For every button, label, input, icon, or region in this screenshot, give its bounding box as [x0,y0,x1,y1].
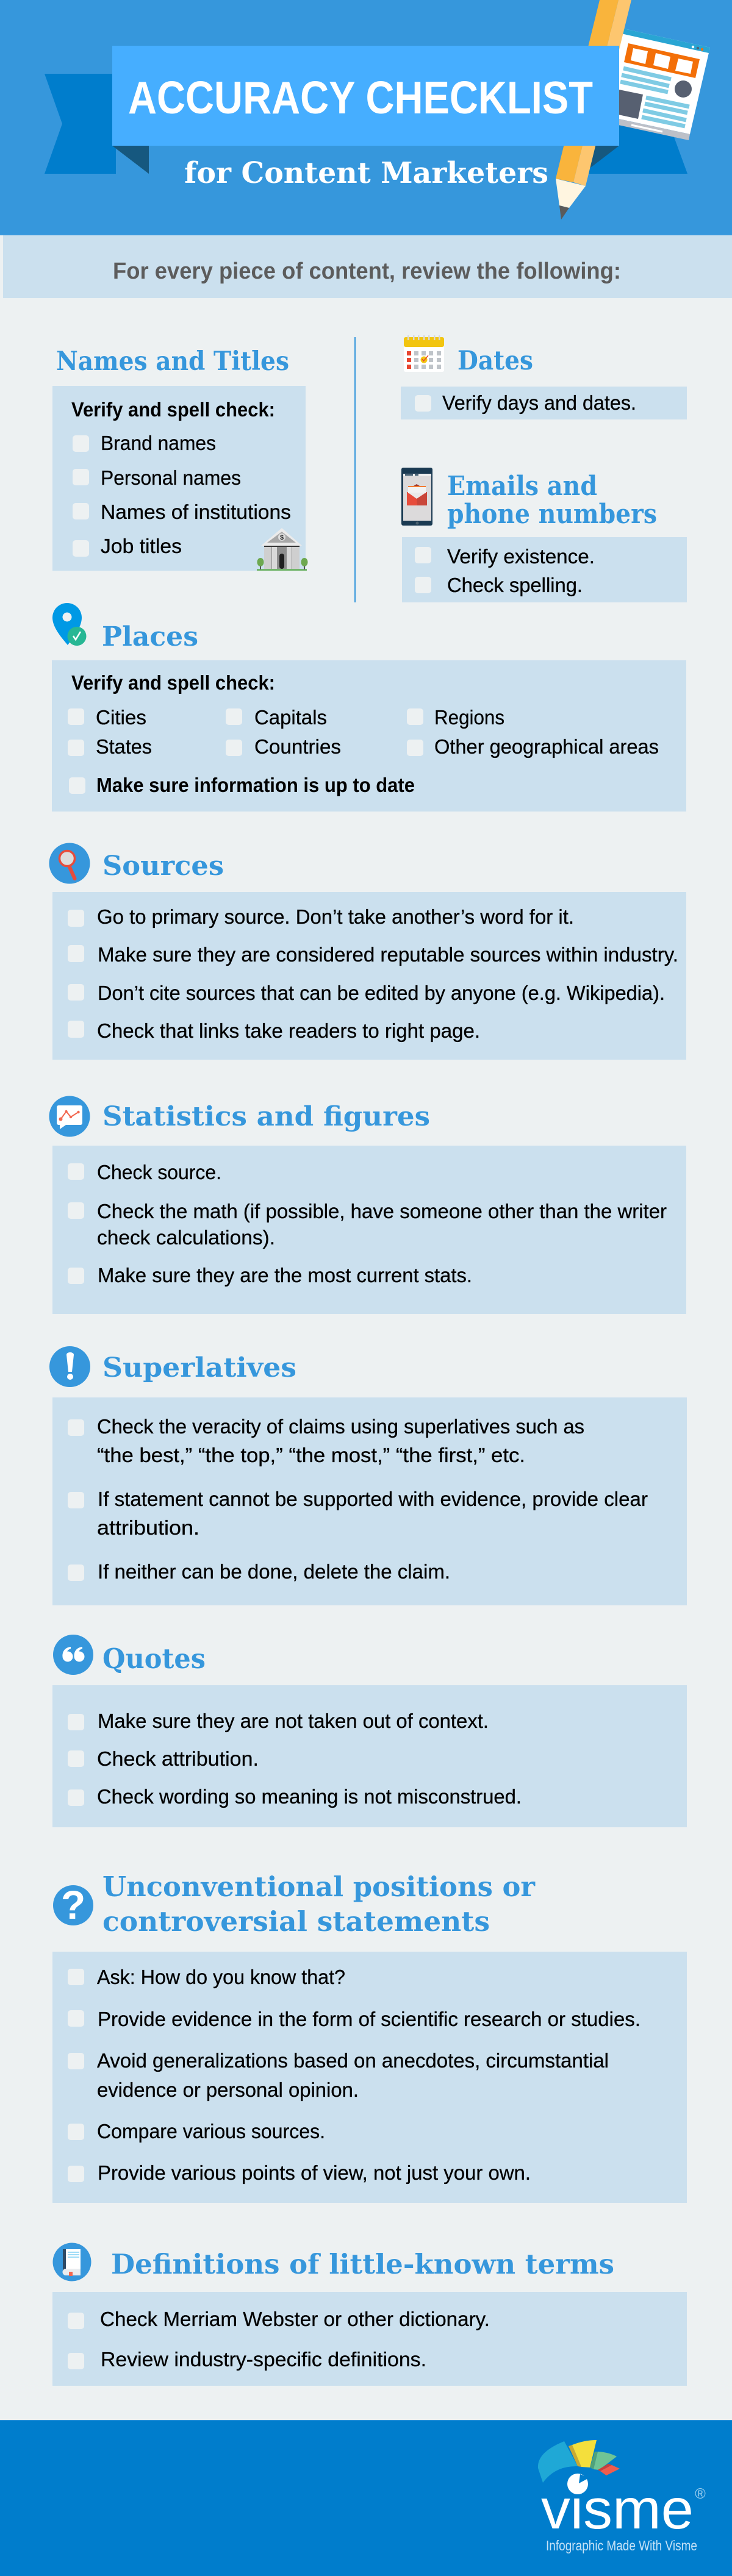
item: cities [68,706,146,729]
heading: quotes: Quotes [102,1643,206,1675]
item: evidence: Provide evidence in the form of scientific research or studies. [98,2008,640,2030]
icon: book [52,2242,92,2282]
heading: names and titles: Names and Titles [56,346,289,377]
icon: phone with envelope [401,468,432,526]
item: check spelling: Check spelling. [447,574,583,596]
title ribbon [112,46,619,146]
item: clear attribution: attribution. [97,1516,199,1539]
item: regions: Regions [434,706,504,729]
panel: places [52,603,686,812]
item: check math: check calculations). [97,1226,275,1249]
heading: places: Places [102,621,198,652]
item: cities: Cities [96,706,146,729]
panel: unconventional positions [52,1871,687,2203]
heading: emails and phone numbers: phone numbers [447,499,657,530]
checklist box [52,1146,686,1314]
item: veracity of claims [68,1415,584,1466]
item: institutions: Names of institutions [101,501,291,523]
icon: bank building: $ [280,534,284,541]
heading: unconventional positions: controversial statements [102,1905,490,1938]
item: current stats: Make sure they are the most current stats. [98,1264,472,1286]
heading: superlatives: Superlatives [102,1352,296,1383]
checklist box [52,892,686,1060]
checklist box [52,660,686,812]
item: job titles: Job titles [101,535,182,557]
ribbon right tail [583,74,687,174]
item: other areas: Other geographical areas [434,735,659,758]
item: primary source: Go to primary source. Don’t take another’s word for it. [97,905,574,928]
item: personal names: Personal names [101,466,241,489]
footer [0,2420,732,2576]
heading: dates: Dates [458,346,533,376]
checklist box [402,537,687,602]
heading: unconventional positions [102,1871,536,1938]
panel: dates [401,335,687,419]
item: compare sources: Compare various sources. [97,2120,325,2143]
heading: emails and phone numbers [447,471,657,530]
divider [354,337,356,602]
heading: definitions: Definitions of little-known terms [111,2248,614,2280]
subtitle: for Content Marketers [184,156,548,190]
icon: bank building [257,528,307,571]
item: wording: Check wording so meaning is not misconstrued. [97,1785,522,1808]
icon: map pin with check [52,603,87,646]
icon: exclamation mark [49,1346,90,1387]
icon: web page window [610,26,710,140]
panel: definitions [52,2242,687,2386]
heading: unconventional positions: Unconventional positions or [102,1871,536,1903]
header banner [0,0,732,235]
item: brand names: Brand names [101,432,216,454]
heading: statistics and figures: Statistics and figures [102,1101,430,1132]
icon: question mark [53,1882,93,1927]
item: generalizations: Avoid generalizations based on anecdotes, circumstantial [97,2049,609,2072]
icon: calendar [404,335,444,372]
item: clear attribution [68,1488,648,1539]
tagline: Infographic Made With Visme [546,2538,697,2553]
checklist box [401,387,687,419]
item: dictionary: Check Merriam Webster or other dictionary. [100,2308,490,2330]
item: veracity of claims: “the best,” “the top,” “the most,” “the first,” etc. [97,1444,525,1466]
lead text: Verify and spell check: [71,671,275,694]
registered mark: ® [695,2486,706,2502]
checklist box [52,1685,687,1827]
panel: names and titles [52,346,307,571]
item: editable sources: Don’t cite sources that can be edited by anyone (e.g. Wikipedia). [98,982,665,1004]
intro strip: For every piece of content, review the following: [113,259,621,284]
title ribbon: ACCURACY CHECKLIST [128,72,593,123]
panel: statistics and figures [49,1096,686,1314]
item: points of view: Provide various points of view, not just your own. [98,2161,531,2184]
item: attribution: Check attribution. [97,1747,259,1770]
item: reputable sources: Make sure they are considered reputable sources within industry. [98,943,678,966]
item: check math: Check the math (if possible, have someone other than the writer [97,1200,667,1222]
icon: chart bubble [49,1096,90,1136]
panel: quotes [52,1635,687,1827]
item: check math [68,1200,667,1249]
item: delete the claim: If neither can be done, delete the claim. [98,1560,450,1583]
icon: quotation marks [53,1635,93,1675]
item: links: Check that links take readers to right page. [97,1019,480,1042]
item: regions [407,706,504,729]
icon: visme logo fan [538,2440,620,2494]
ribbon left tail [45,74,149,174]
item: days and dates: Verify days and dates. [442,391,636,414]
checklist box [52,386,306,571]
item: generalizations: evidence or personal opinion. [97,2078,359,2101]
item: generalizations [68,2049,609,2101]
panel: emails and phone numbers [401,468,687,602]
intro strip [3,235,732,298]
icon: magnifying glass [49,843,90,884]
item: states [68,735,152,758]
item: up to date: Make sure information is up to date [96,774,415,796]
item: clear attribution: If statement cannot be supported with evidence, provide clear [98,1488,648,1510]
heading: sources: Sources [102,851,224,882]
checklist box [52,1952,687,2203]
item: context: Make sure they are not taken out of context. [98,1710,489,1732]
lead text: Verify and spell check: [71,398,275,421]
checklist box [52,1397,687,1605]
item: capitals: Capitals [254,706,327,729]
checklist box [52,2292,687,2386]
item: ask: Ask: How do you know that? [97,1966,345,1988]
item: veracity of claims: Check the veracity of claims using superlatives such as [97,1415,584,1438]
icon: pencil [556,0,631,219]
panel: sources [49,843,686,1060]
logo wordmark: visme [541,2477,694,2541]
icon: question mark: ? [61,1882,85,1927]
panel: superlatives [49,1346,687,1605]
item: states: States [96,735,152,758]
heading: emails and phone numbers: Emails and [447,471,597,502]
item: industry definitions: Review industry-specific definitions. [101,2348,426,2371]
item: check source: Check source. [97,1161,221,1183]
item: verify existence: Verify existence. [447,545,595,568]
item: countries: Countries [254,735,341,758]
